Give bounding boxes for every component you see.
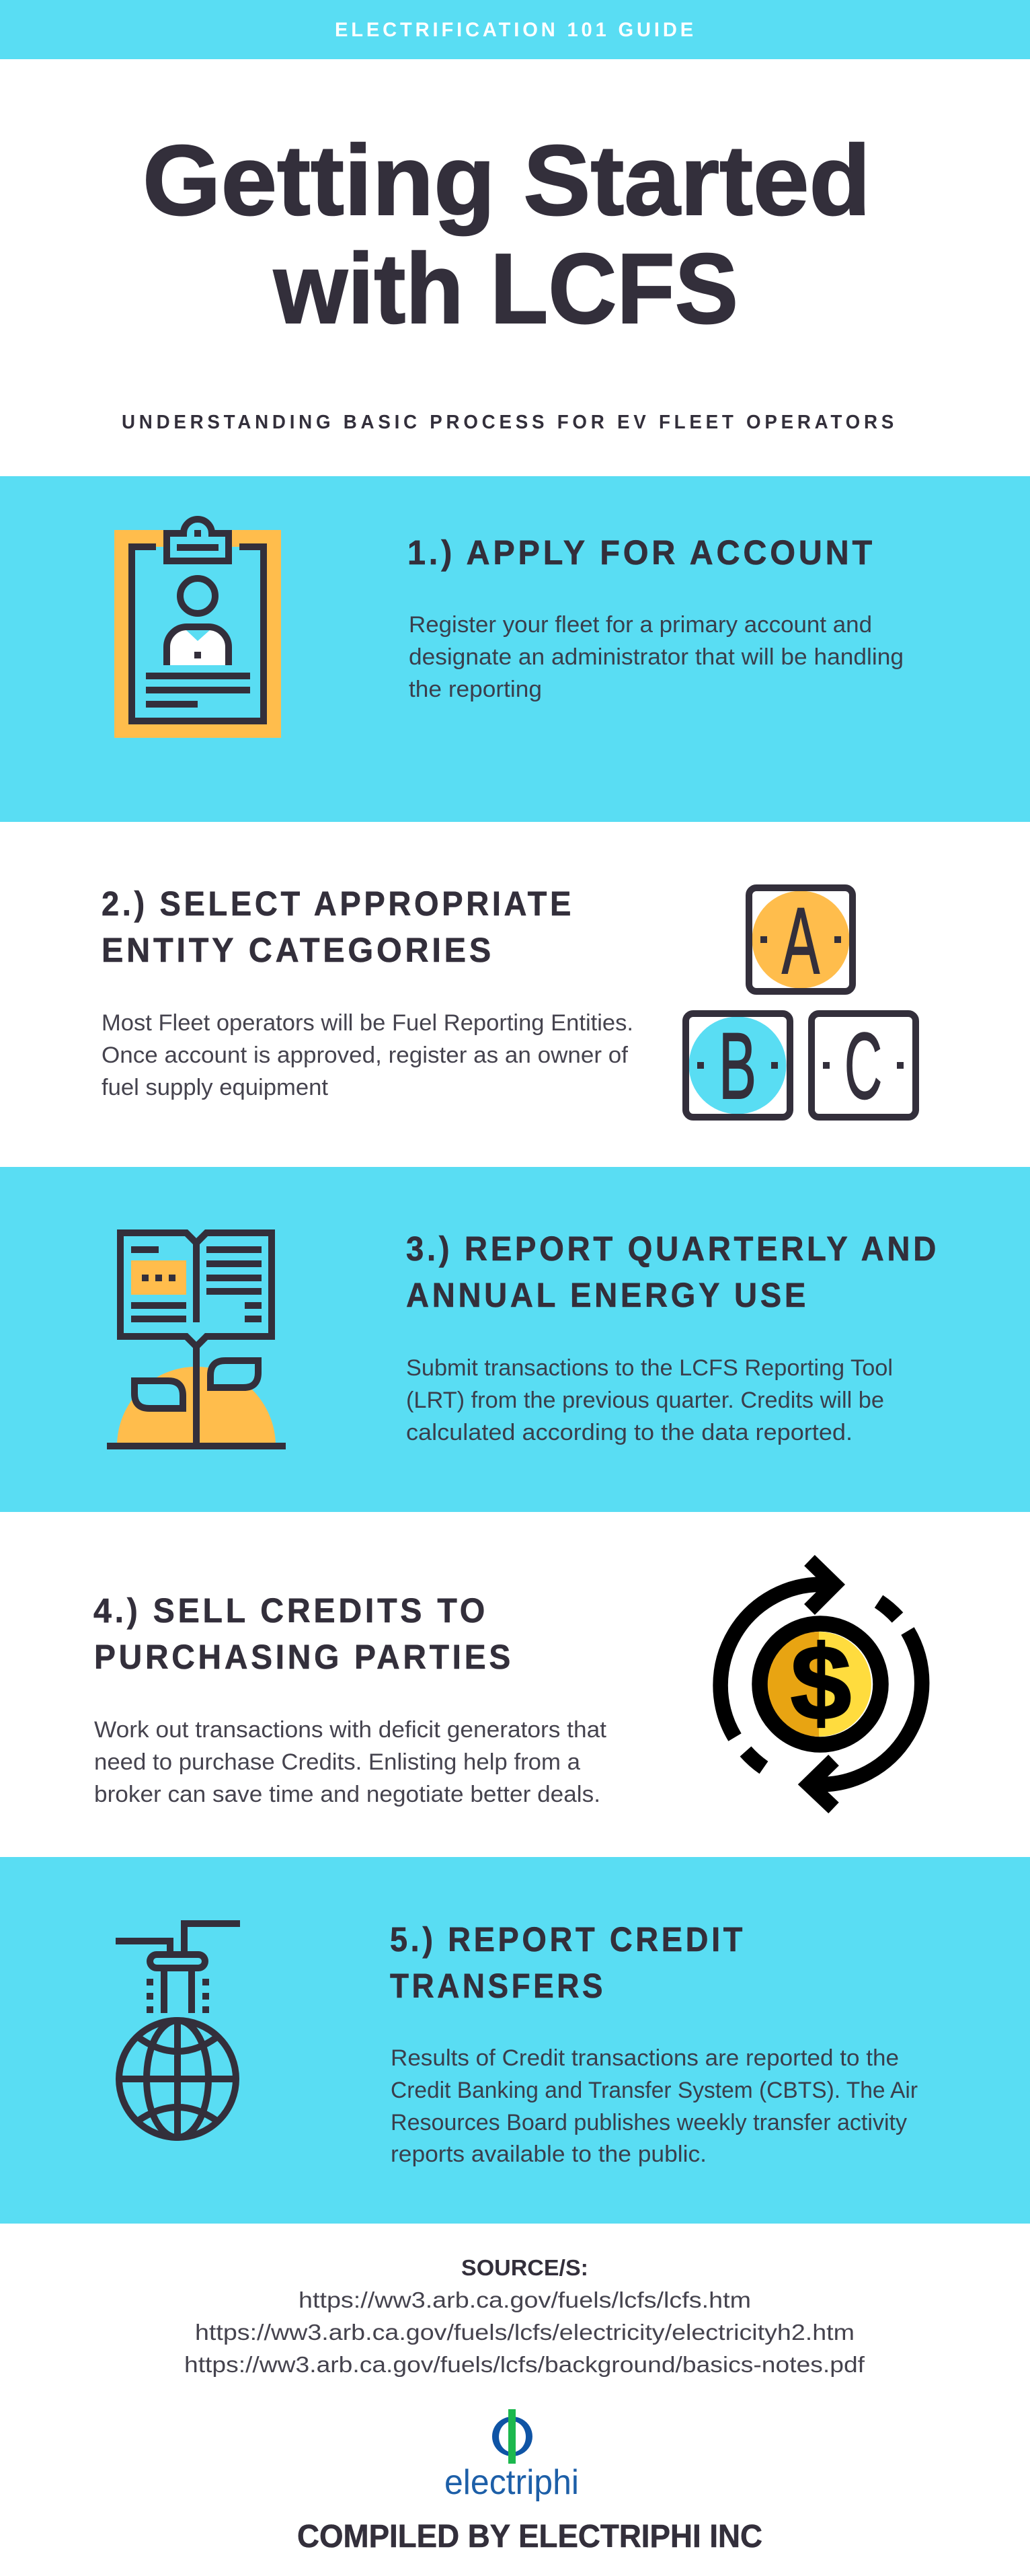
text block: step 5: reports available to the public.: [391, 2142, 707, 2167]
text block: step 2: Most Fleet operators will be Fuel Reporting Entities.: [102, 1010, 633, 1036]
text block: step 4: [94, 1717, 607, 1807]
icon: ABC blocks: [686, 888, 916, 1119]
heading: step 3: ANNUAL ENERGY USE: [406, 1276, 809, 1314]
title: with LCFS: [273, 233, 738, 344]
heading: step 2: 2.) SELECT APPROPRIATE: [102, 884, 574, 923]
logo: electriphi: electriphi: [444, 2463, 579, 2502]
heading: step 5: 5.) REPORT CREDIT: [390, 1920, 746, 1959]
logo: electriphi: [444, 2409, 579, 2502]
text block: step 3: [406, 1355, 893, 1445]
icon: ABC blocks: C: [844, 1013, 882, 1119]
heading: step 4: PURCHASING PARTIES: [94, 1638, 514, 1676]
title: [143, 125, 871, 344]
text block: step 5: Credit Banking and Transfer System (CBTS). The Air: [391, 2078, 918, 2103]
text block: step 1: Register your fleet for a primary account and: [409, 612, 872, 638]
heading: step 3: [406, 1229, 939, 1314]
text block: step 2: fuel supply equipment: [102, 1075, 329, 1100]
panel: step 2 entity categories: [102, 884, 916, 1119]
heading: step 2: ENTITY CATEGORIES: [102, 931, 494, 969]
text block: step 3: calculated according to the data reported.: [406, 1420, 853, 1445]
text block: step 1: [409, 612, 904, 702]
header band: ELECTRIFICATION 101 GUIDE: [335, 19, 697, 41]
icon: book plant: [107, 1233, 286, 1446]
text block: step 3: (LRT) from the previous quarter. Credits will be: [406, 1388, 884, 1413]
text block: step 2: Once account is approved, register as an owner of: [102, 1043, 629, 1068]
heading: step 1: 1.) APPLY FOR ACCOUNT: [407, 533, 875, 572]
icon: dollar coin exchange: $: [791, 1624, 851, 1742]
header band: [0, 0, 1030, 59]
heading: step 4: 4.) SELL CREDITS TO: [93, 1591, 488, 1630]
text block: step 5: Results of Credit transactions are reported to the: [391, 2045, 899, 2071]
sources: https://ww3.arb.ca.gov/fuels/lcfs/lcfs.htm: [299, 2287, 751, 2312]
text block: step 4: need to purchase Credits. Enlisting help from a: [94, 1749, 580, 1775]
heading: step 5: [390, 1920, 746, 2005]
heading: step 4: [93, 1591, 514, 1676]
icon: clipboard with person: [114, 519, 281, 738]
sources: https://ww3.arb.ca.gov/fuels/lcfs/background/basics-notes.pdf: [184, 2352, 865, 2377]
text block: step 1: designate an administrator that will be handling: [409, 644, 904, 670]
text block: step 2: [102, 1010, 633, 1100]
panel: step 3 report energy use: [0, 1167, 1030, 1512]
icon: ABC blocks: B: [719, 1013, 756, 1119]
credit line: COMPILED BY ELECTRIPHI INC: [297, 2519, 762, 2554]
text block: step 4: Work out transactions with deficit generators that: [94, 1717, 607, 1743]
icon: globe with plug: [116, 1924, 240, 2137]
text block: step 5: [391, 2045, 918, 2167]
text block: step 1: the reporting: [409, 677, 542, 702]
icon: dollar coin exchange: [721, 1560, 922, 1808]
heading: step 5: TRANSFERS: [390, 1967, 606, 2005]
icon: ABC blocks: A: [782, 888, 820, 993]
heading: step 2: [102, 884, 574, 969]
panel: step 5 report credit transfers: [0, 1857, 1030, 2224]
title: Getting Started: [143, 125, 871, 236]
text block: step 3: Submit transactions to the LCFS Reporting Tool: [406, 1355, 893, 1381]
subtitle: UNDERSTANDING BASIC PROCESS FOR EV FLEET OPERATORS: [122, 412, 898, 433]
panel: step 1 apply for account: [0, 476, 1030, 822]
panel: step 4 sell credits: [93, 1560, 922, 1808]
sources: [184, 2255, 865, 2377]
text block: step 4: broker can save time and negotiate better deals.: [94, 1782, 600, 1807]
sources: https://ww3.arb.ca.gov/fuels/lcfs/electricity/electricityh2.htm: [195, 2320, 855, 2345]
heading: step 3: 3.) REPORT QUARTERLY AND: [406, 1229, 939, 1268]
text block: step 5: Resources Board publishes weekly transfer activity: [391, 2110, 907, 2135]
sources: SOURCE/S:: [461, 2255, 588, 2280]
